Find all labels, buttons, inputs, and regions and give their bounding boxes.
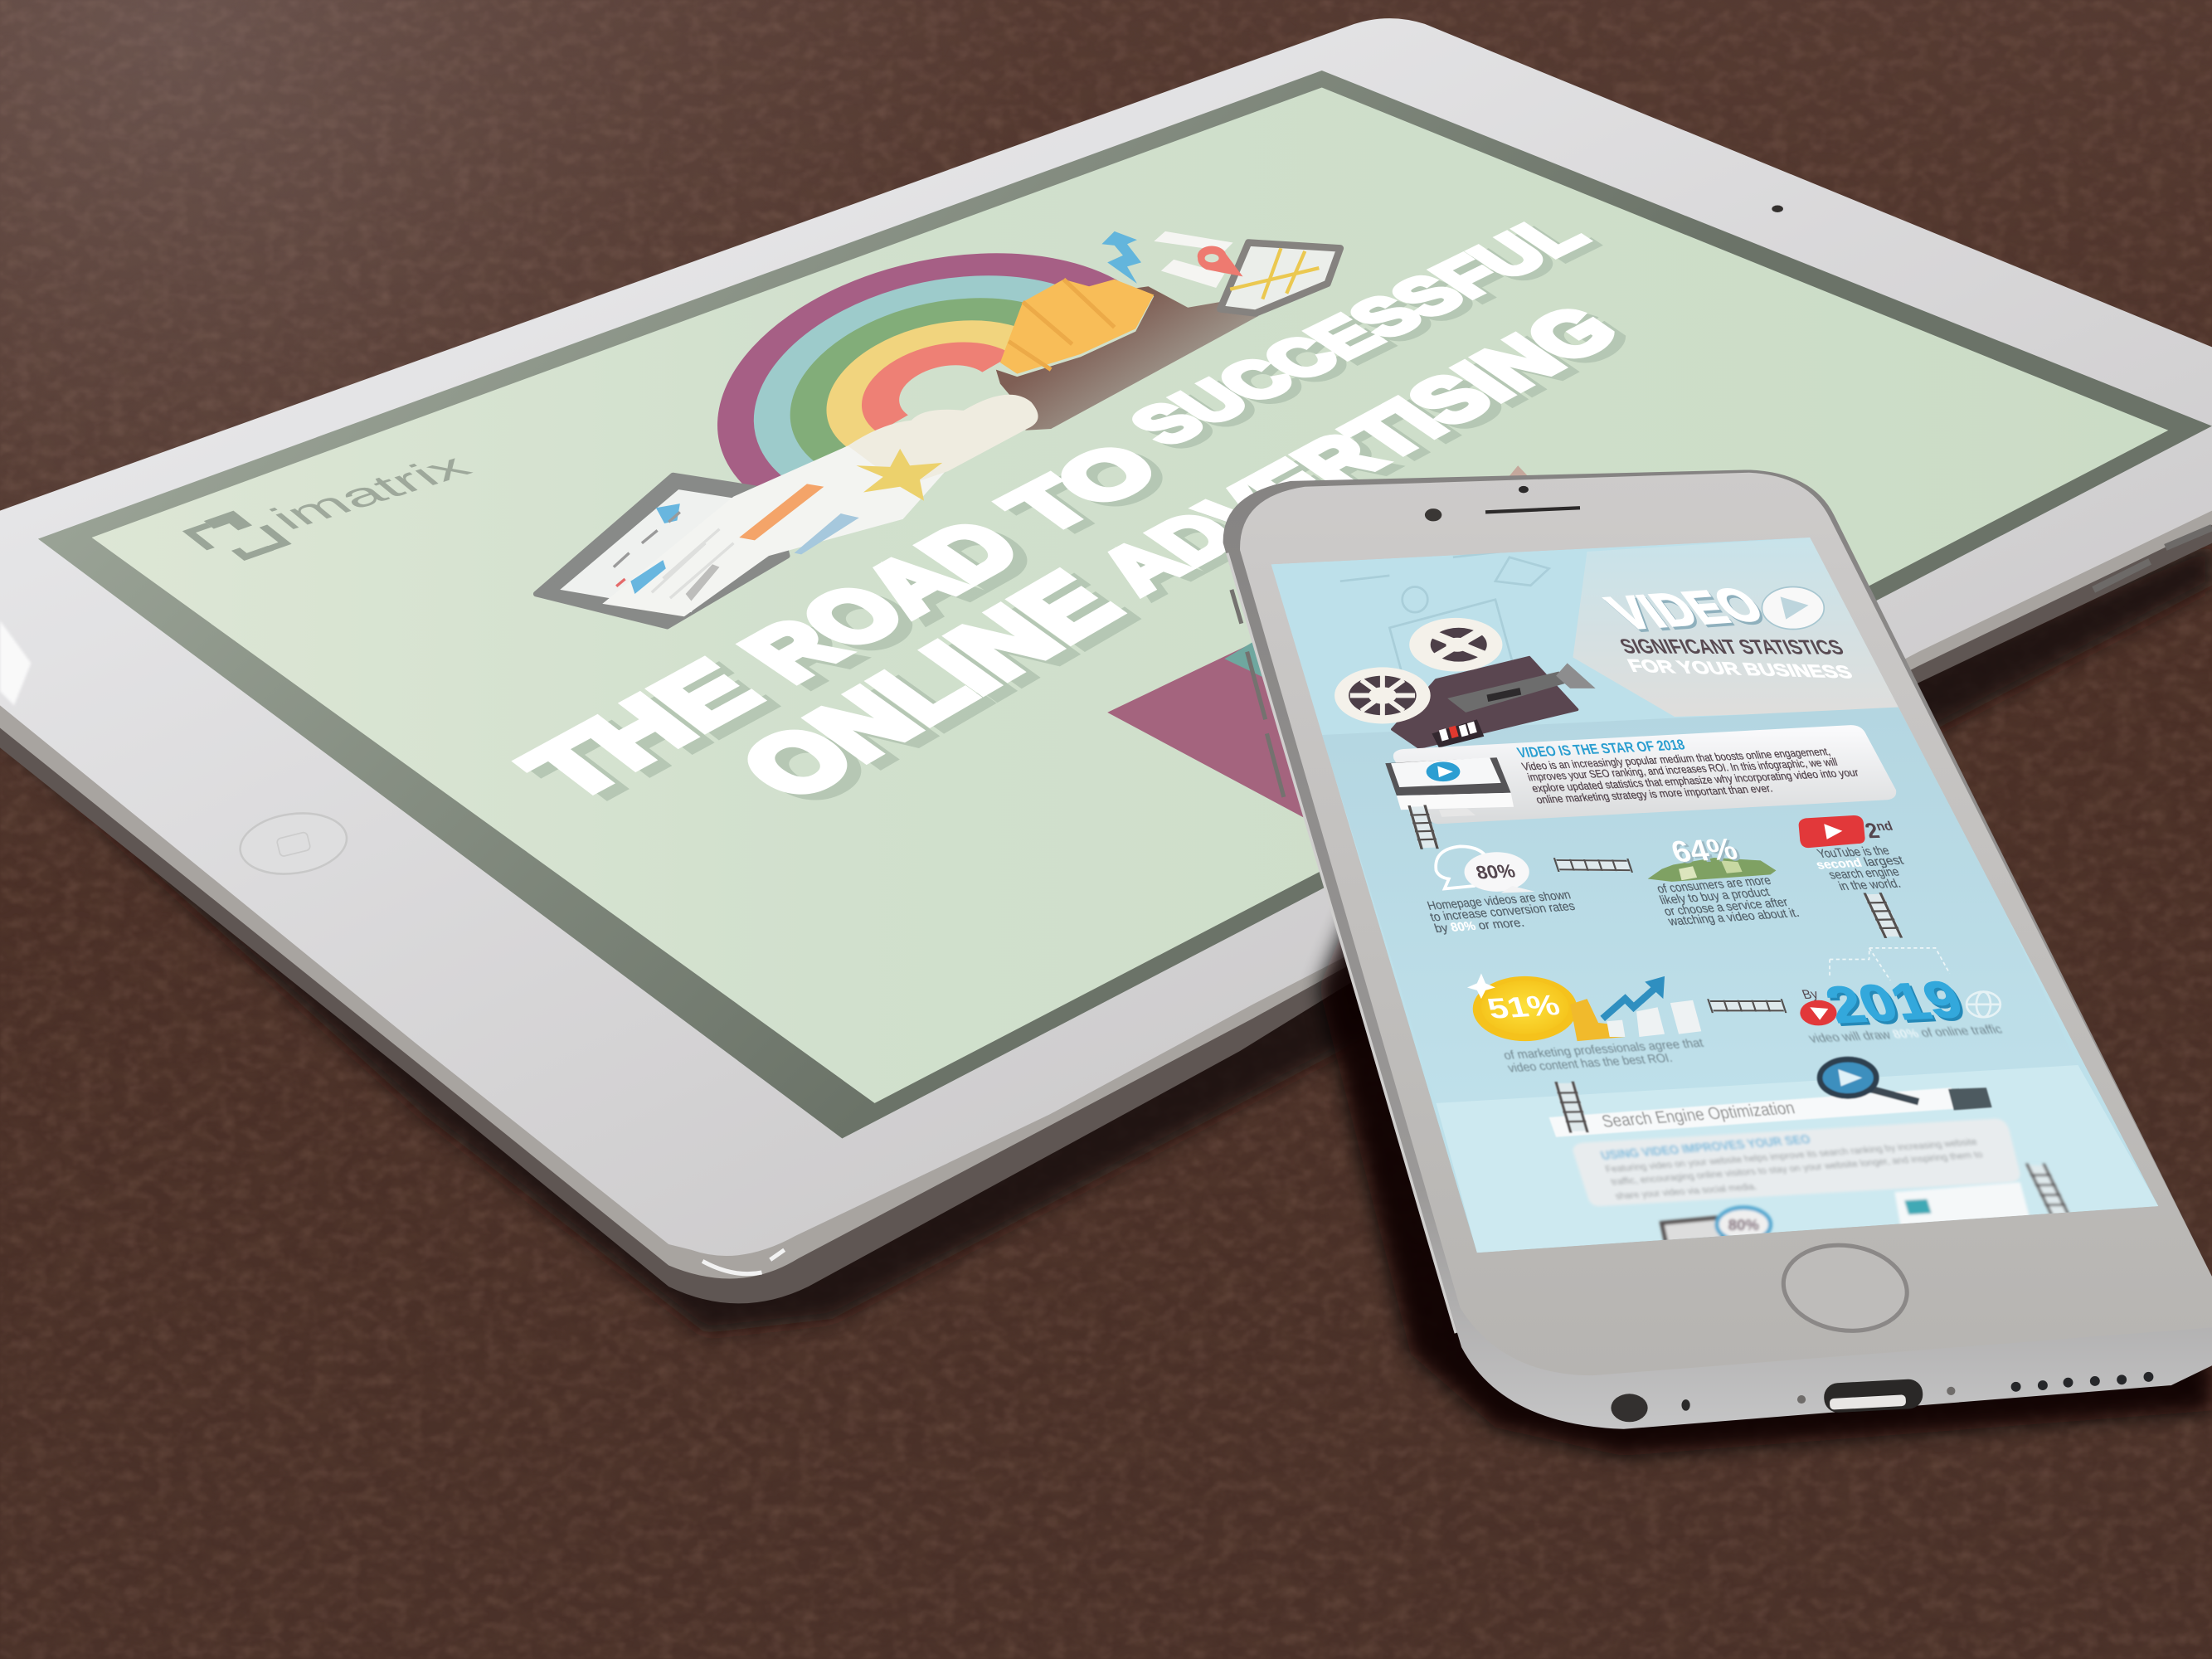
caption <box>1655 873 1801 929</box>
map phone and papers <box>1154 231 1340 314</box>
vent <box>1486 688 1521 702</box>
caption: likely to buy a product <box>1658 885 1772 907</box>
volume buttons <box>1232 590 1284 797</box>
search button <box>1948 1087 1992 1110</box>
2019 depth: 2019 <box>1820 973 1974 1037</box>
caption: of consumers are more <box>1655 873 1773 896</box>
play icon <box>1762 586 1824 630</box>
card heading: USING VIDEO IMPROVES YOUR SEO <box>1599 1132 1812 1163</box>
rainbow <box>654 212 1114 491</box>
star <box>856 449 942 501</box>
stat: marketing ROI <box>1467 973 1706 1075</box>
caption: YouTube is the <box>1816 844 1892 861</box>
lens barrel <box>1447 672 1568 713</box>
51 percent: 51% <box>1484 989 1563 1025</box>
tablet shadow <box>0 543 2212 1333</box>
tablet <box>0 18 2212 1303</box>
80 percent: 80% <box>1474 861 1518 883</box>
title shadow: ROAD <box>734 510 1057 701</box>
2019: 2019 <box>1817 971 1971 1034</box>
card text: online marketing strategy is more important than ever. <box>1534 782 1774 805</box>
coin stack <box>1570 999 1625 1041</box>
caption <box>1426 889 1577 936</box>
stat: 2019 traffic <box>1800 948 2005 1046</box>
title shadow: ADVERTISING <box>1090 297 1648 610</box>
earpiece <box>1485 508 1580 512</box>
projector body <box>1393 658 1578 747</box>
subtitle: SIGNIFICANT STATISTICS <box>1616 635 1848 659</box>
2nd: nd <box>1874 820 1895 834</box>
magnifier <box>1820 1059 1918 1102</box>
caption: second largest <box>1814 854 1907 872</box>
right ladder <box>2025 1164 2071 1216</box>
logo wordmark: imatrix <box>260 448 481 537</box>
speech bubbles <box>1436 846 1535 893</box>
phone face <box>1240 473 2212 1375</box>
title shadow <box>516 208 1648 821</box>
card text <box>1520 745 1860 805</box>
projector beam <box>1573 538 1908 717</box>
card background <box>1573 1119 2020 1206</box>
card heading: VIDEO IS THE STAR OF 2018 <box>1515 737 1687 761</box>
youtube icon <box>1799 815 1865 848</box>
64 percent: 64% <box>1666 832 1742 868</box>
caption: to increase conversion rates <box>1428 900 1577 924</box>
projector <box>1334 618 1596 747</box>
rim highlight <box>1228 553 1456 1333</box>
caption: by 80% or more. <box>1433 917 1526 936</box>
caption: in the world. <box>1836 877 1903 893</box>
SEO info card <box>1573 1119 2020 1206</box>
card background <box>1393 725 1896 824</box>
title: ROAD <box>720 505 1043 696</box>
search bar text: Search Engine Optimization <box>1600 1098 1797 1131</box>
cloud <box>848 395 1038 487</box>
intro card <box>1385 725 1896 824</box>
phone screen <box>1271 538 2158 1256</box>
caption: Homepage videos are shown <box>1426 889 1573 913</box>
caption: video content has the best ROI. <box>1506 1052 1675 1075</box>
title: ADVERTISING <box>1078 293 1636 606</box>
trend arrow <box>1602 985 1659 1019</box>
money pile <box>1648 858 1776 882</box>
64 percent: 64% <box>1670 834 1744 870</box>
caption <box>1502 1037 1706 1075</box>
card text <box>1604 1137 1985 1201</box>
By label: By <box>1800 988 1821 1002</box>
tablet front body <box>0 18 2212 1256</box>
2nd: 2 <box>1861 819 1883 843</box>
phone rim <box>1223 469 2212 1429</box>
title: SUCCESSFUL <box>1113 204 1602 455</box>
title shadow: ONLINE <box>731 562 1156 821</box>
search bar <box>1549 1087 1955 1137</box>
SEO section <box>1549 1059 1992 1137</box>
camera <box>1772 205 1783 212</box>
bottom ports <box>1611 1372 2153 1422</box>
caption: watching a video about it. <box>1665 906 1801 929</box>
title shadow: THE <box>516 651 794 821</box>
pot of gold <box>996 280 1258 431</box>
film strip 1 <box>1554 858 1632 873</box>
globe <box>1966 992 2001 1017</box>
title: THE <box>502 645 780 815</box>
title: TO <box>983 430 1179 547</box>
caption: or choose a service after <box>1662 895 1790 919</box>
corner highlight <box>702 1250 785 1274</box>
rim silver band <box>0 494 2212 1278</box>
network diagram <box>1830 948 1950 980</box>
heading <box>1597 579 1855 682</box>
title shadow: TO <box>994 434 1190 551</box>
tagline: FOR YOUR BUSINESS <box>1625 656 1855 682</box>
card text: improves your SEO ranking, and increases ROI. In this infographic, we will <box>1526 756 1839 783</box>
stat: consumers <box>1648 832 1801 929</box>
80 percent badge <box>1717 1208 1771 1242</box>
title: ONLINE <box>717 557 1142 816</box>
glare <box>0 620 31 705</box>
connector ladder <box>1407 805 1439 849</box>
stat: youtube <box>1799 815 1907 938</box>
screen background <box>1271 538 2158 1253</box>
title <box>502 204 1636 816</box>
caption <box>1814 844 1907 893</box>
tablet side rim <box>0 479 2212 1303</box>
phone shadow <box>1319 902 2212 1456</box>
growth arrow <box>1101 231 1141 284</box>
title shadow: SUCCESSFUL <box>1123 208 1612 460</box>
small purple triangle <box>1107 465 1540 818</box>
screen <box>92 87 2168 1103</box>
lower background band <box>1322 707 2004 909</box>
control panel <box>1432 719 1484 747</box>
top reel <box>1409 618 1502 672</box>
caption: of marketing professionals agree that <box>1502 1037 1706 1063</box>
card text: traffic, encouraging online visitors to stay on your website longer, and inspiring them to <box>1610 1150 1985 1187</box>
card text: share your video via social media. <box>1614 1182 1758 1201</box>
home button <box>236 807 351 880</box>
play pin <box>1800 1000 1837 1025</box>
laptop and page <box>536 445 948 626</box>
monitor <box>1385 757 1514 817</box>
right card <box>1894 1182 2035 1248</box>
film strip 2 <box>1708 999 1786 1013</box>
VIDEO: VIDEO <box>1599 581 1778 642</box>
bottom monitor <box>1662 1218 1723 1256</box>
phone <box>1223 469 2212 1429</box>
left reel <box>1334 667 1431 723</box>
ladder <box>1554 1082 1589 1133</box>
80 percent badge: 80% <box>1728 1216 1759 1233</box>
screen frame <box>38 71 2212 1138</box>
camera <box>1425 486 1529 521</box>
bottom cut-off elements <box>1662 1164 2071 1256</box>
ghost background icons <box>1340 552 1551 670</box>
ladder <box>1863 893 1903 938</box>
caption: search engine <box>1826 865 1902 882</box>
card text: Video is an increasingly popular medium that boosts online engagement, <box>1520 745 1832 772</box>
VIDEO: VIDEO <box>1597 579 1775 640</box>
logo mark <box>189 512 285 563</box>
bars <box>1607 1000 1701 1037</box>
home button <box>1778 1238 1913 1339</box>
card text: explore updated statistics that emphasize why incorporating video into your <box>1530 766 1860 795</box>
stat: homepage videos <box>1426 846 1577 936</box>
caption: video will draw 80% of online traffic <box>1806 1023 2005 1046</box>
gold coin <box>1467 973 1578 1041</box>
side buttons <box>2093 528 2212 590</box>
card text: Featuring video on your website helps improve its search ranking by increasing website <box>1604 1137 1979 1175</box>
imatrix logo <box>189 448 481 563</box>
